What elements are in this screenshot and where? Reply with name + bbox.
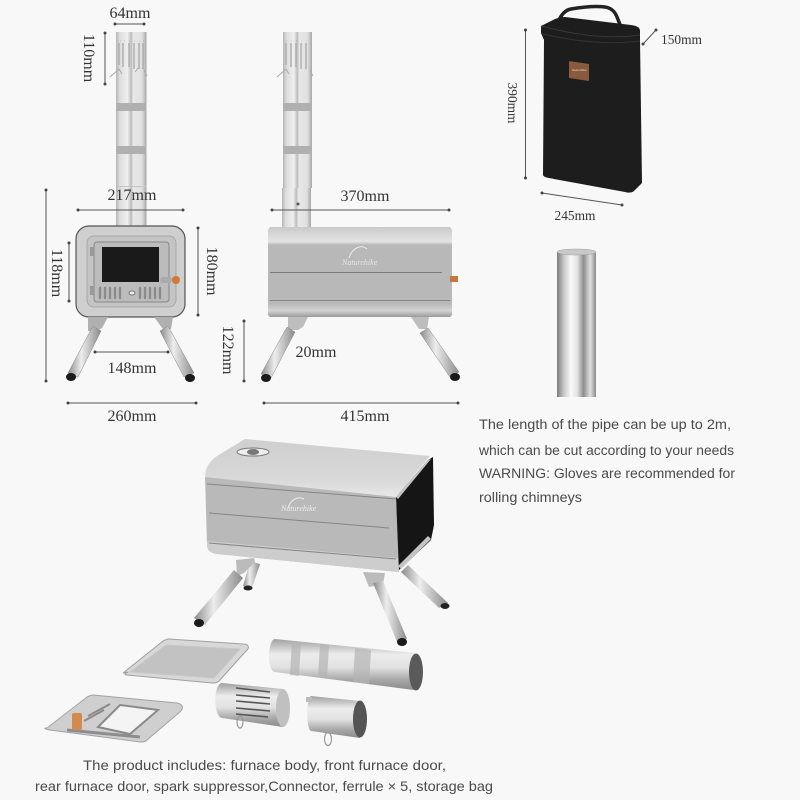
stove body: side view: Naturehike: [341, 258, 378, 267]
bag leather patch: [569, 61, 589, 81]
pipe description text: The length of the pipe can be up to 2m,: [479, 417, 731, 432]
burner hole: [237, 448, 269, 456]
dimensions: front view: [44, 5, 246, 425]
label 415mm: 415mm: [341, 408, 390, 425]
label 260mm: [66, 402, 198, 425]
side view stove with chimney: [261, 32, 460, 382]
product caption: The product includes: furnace body, front furnace door,: [83, 757, 446, 773]
label 415mm: [262, 402, 460, 425]
label 180mm: 180mm: [203, 247, 220, 296]
product caption: rear furnace door, spark suppressor,Connector, ferrule × 5, storage bag: [35, 778, 493, 794]
bag leather patch: Naturehike: [572, 68, 587, 72]
pipe description text: [478, 417, 736, 505]
naturehike logo: [280, 498, 317, 513]
label 370mm: 370mm: [341, 188, 390, 205]
chimney pipe roll: [557, 249, 596, 397]
label 150mm: 150mm: [661, 32, 703, 47]
product caption: [35, 757, 493, 794]
outer height line: [44, 188, 48, 382]
bag handle: [558, 7, 621, 27]
chimney: front view: [110, 32, 147, 227]
parts: spark suppressor: [215, 683, 290, 728]
legs: front view: [66, 317, 195, 382]
parts: tray (front furnace door): [123, 639, 248, 683]
label 148mm: [94, 350, 170, 377]
pipe description text: which can be cut according to your needs: [478, 443, 734, 458]
top face: [205, 439, 430, 497]
parts: connector: [306, 696, 367, 746]
right dark opening: [396, 457, 434, 571]
label 245mm: 245mm: [555, 208, 596, 223]
front legs: [194, 558, 407, 646]
label 150mm: [642, 28, 703, 47]
label 118mm: [48, 242, 70, 302]
stove body: side view: [268, 227, 458, 317]
label 180mm: [196, 226, 220, 316]
front view stove with chimney: [66, 32, 195, 382]
naturehike logo: Naturehike: [280, 504, 317, 513]
label 260mm: 260mm: [108, 408, 157, 425]
front face: [205, 477, 399, 572]
label 390mm: [505, 28, 527, 180]
pipe description text: rolling chimneys: [479, 490, 582, 505]
label 64mm: 64mm: [110, 5, 151, 22]
label 245mm: [540, 192, 624, 223]
open furnace body: [194, 439, 450, 646]
parts: long pipe: [269, 639, 423, 690]
legs: side view: [261, 317, 460, 382]
back legs: [243, 561, 450, 609]
parts: rear furnace door: [45, 695, 182, 742]
label 122mm: [219, 320, 246, 382]
label 390mm: 390mm: [505, 83, 520, 124]
pipe description text: WARNING: Gloves are recommended for: [479, 466, 736, 481]
bag body: [541, 17, 642, 193]
label 110mm: 110mm: [80, 34, 97, 83]
stove body: front view: [76, 226, 185, 317]
label 20mm: 20mm: [296, 344, 337, 361]
label 110mm: [80, 32, 106, 86]
opening frame: [398, 536, 431, 569]
label 370mm: [270, 188, 450, 212]
label 118mm: 118mm: [48, 249, 65, 298]
chimney: side view: [277, 32, 313, 228]
storage bag: [505, 7, 703, 223]
label 217mm: [76, 187, 184, 212]
label 148mm: 148mm: [108, 360, 157, 377]
label 217mm: 217mm: [108, 187, 157, 204]
dimensions: side view: [262, 188, 460, 425]
label 122mm: 122mm: [219, 326, 236, 375]
